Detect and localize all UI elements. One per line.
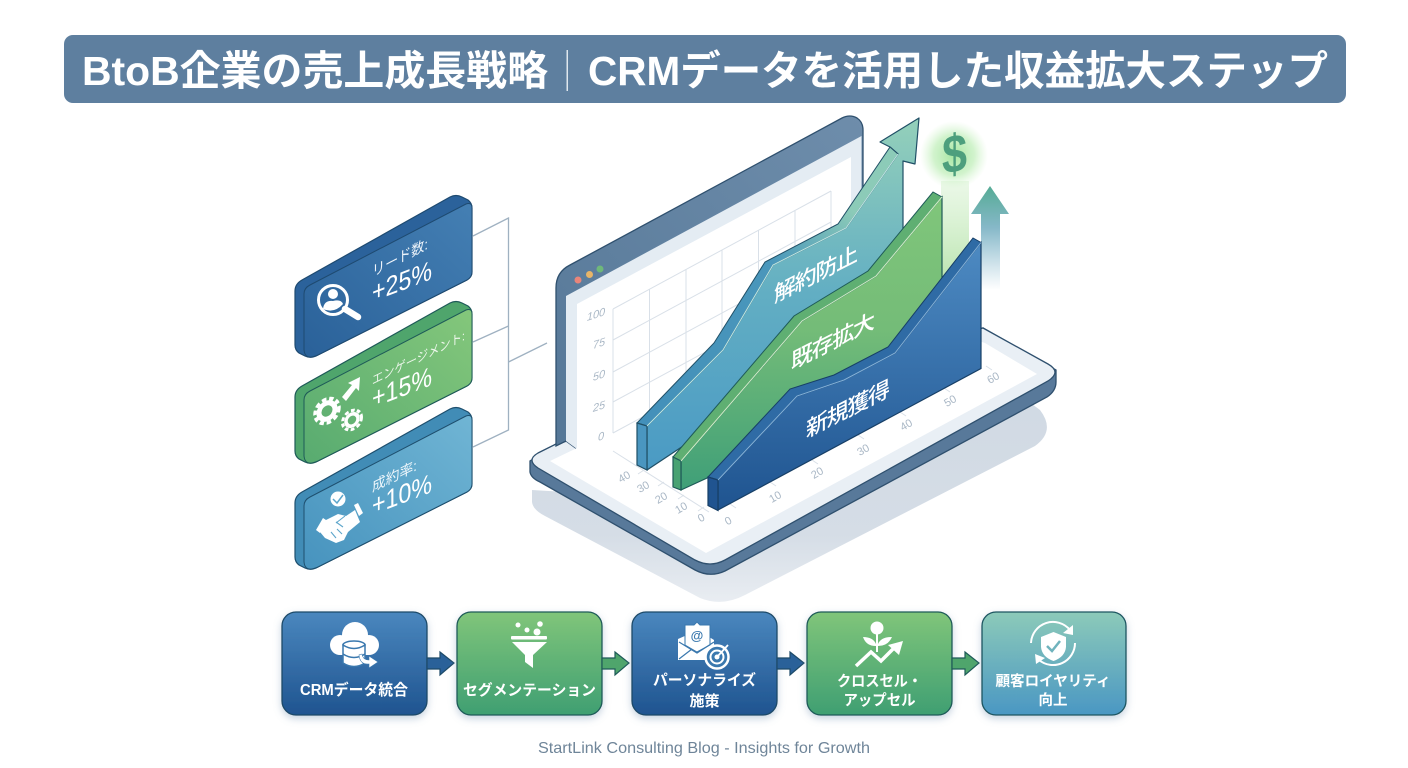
- step label: クロスセル・: [837, 673, 922, 690]
- process step: segmentation: [457, 612, 602, 715]
- process step: personalized campaign: [632, 612, 777, 715]
- arrow: [427, 652, 454, 675]
- window dots: [574, 266, 604, 284]
- icon: handshake: [316, 492, 363, 543]
- ribbon label: 既存拡大: [791, 307, 875, 375]
- arrow: [602, 652, 629, 675]
- laptop base: [530, 328, 1056, 574]
- value: engagement: +15%: [372, 361, 432, 414]
- KPI card: close rate: [295, 408, 472, 569]
- icon: mail and target: @: [691, 628, 703, 643]
- x axis labels: 30: [855, 442, 872, 459]
- icon: dollar sign: $: [942, 123, 967, 186]
- process step: CRM data integration: [282, 612, 427, 715]
- x axis labels: 0: [696, 512, 707, 525]
- x axis labels: 40: [898, 417, 915, 434]
- x axis labels: 0: [723, 515, 734, 528]
- arrow: [952, 652, 979, 675]
- screen and base white surface: [550, 157, 1037, 553]
- x axis labels: 50: [942, 393, 959, 410]
- ribbon: churn prevention: [637, 118, 919, 470]
- arrow: [777, 652, 804, 675]
- ribbon: new acquisition: [708, 238, 981, 510]
- label: engagement: エンゲージメント:: [372, 328, 465, 388]
- title text: BtoB企業の売上成長戦略: [82, 48, 548, 94]
- chart grid: [613, 191, 992, 512]
- y axis labels: 25: [592, 399, 606, 415]
- light column and dollar glow: [920, 121, 988, 291]
- ribbon label: 新規獲得: [806, 375, 890, 443]
- KPI card: engagement: [295, 302, 472, 463]
- process step: customer loyalty: 向上: [1038, 692, 1068, 709]
- KPI card: leads: [295, 196, 472, 357]
- icon: gears and arrow: [315, 377, 362, 432]
- ribbon label: 解約防止: [774, 240, 858, 308]
- x axis labels: 10: [767, 489, 784, 506]
- icon: mail and target: [678, 622, 728, 668]
- process step: personalized campaign: 施策: [689, 692, 720, 710]
- value: leads: +25%: [372, 255, 432, 308]
- x axis labels: 10: [673, 500, 690, 517]
- x axis labels: 20: [653, 490, 670, 507]
- value: close rate: +10%: [372, 468, 432, 521]
- x axis labels: 20: [809, 465, 826, 482]
- step label: CRMデータ統合: [300, 680, 408, 699]
- ribbon: existing expansion: [673, 192, 942, 490]
- icon: magnifier person: [318, 286, 358, 317]
- title banner: CRMデータを活用した収益拡大ステップ: [588, 48, 1328, 94]
- icon: cloud database: [330, 622, 379, 668]
- title banner: [64, 35, 1346, 103]
- connector lines: [473, 218, 547, 447]
- process step: cross-sell and up-sell: アップセル: [844, 692, 916, 709]
- y axis labels: [587, 306, 606, 444]
- laptop shadow: [532, 380, 1047, 602]
- label: close rate: 成約率:: [372, 458, 417, 496]
- label: leads: リード数:: [372, 235, 428, 281]
- step label: パーソナライズ: [653, 671, 756, 689]
- x axis labels: [616, 370, 1002, 528]
- process step: customer loyalty: [982, 612, 1126, 715]
- icon: funnel: [511, 621, 547, 668]
- y axis labels: 75: [593, 336, 606, 352]
- icon: shield with cycle arrows: [1031, 622, 1075, 665]
- y axis labels: 50: [593, 368, 606, 384]
- y axis labels: 0: [598, 430, 605, 444]
- footer credit: StartLink Consulting Blog - Insights for Growth: [538, 740, 870, 757]
- x axis labels: 30: [635, 479, 652, 496]
- up arrow: [971, 186, 1009, 290]
- x axis labels: 60: [985, 370, 1002, 387]
- y axis labels: 100: [587, 306, 606, 324]
- step label: セグメンテーション: [463, 681, 596, 699]
- laptop screen: [550, 116, 1037, 553]
- process step: cross-sell and up-sell: [807, 612, 952, 715]
- icon: plant and growth arrow: [856, 622, 903, 666]
- step label: 顧客ロイヤリティ: [996, 673, 1110, 690]
- x axis labels: 40: [616, 469, 633, 486]
